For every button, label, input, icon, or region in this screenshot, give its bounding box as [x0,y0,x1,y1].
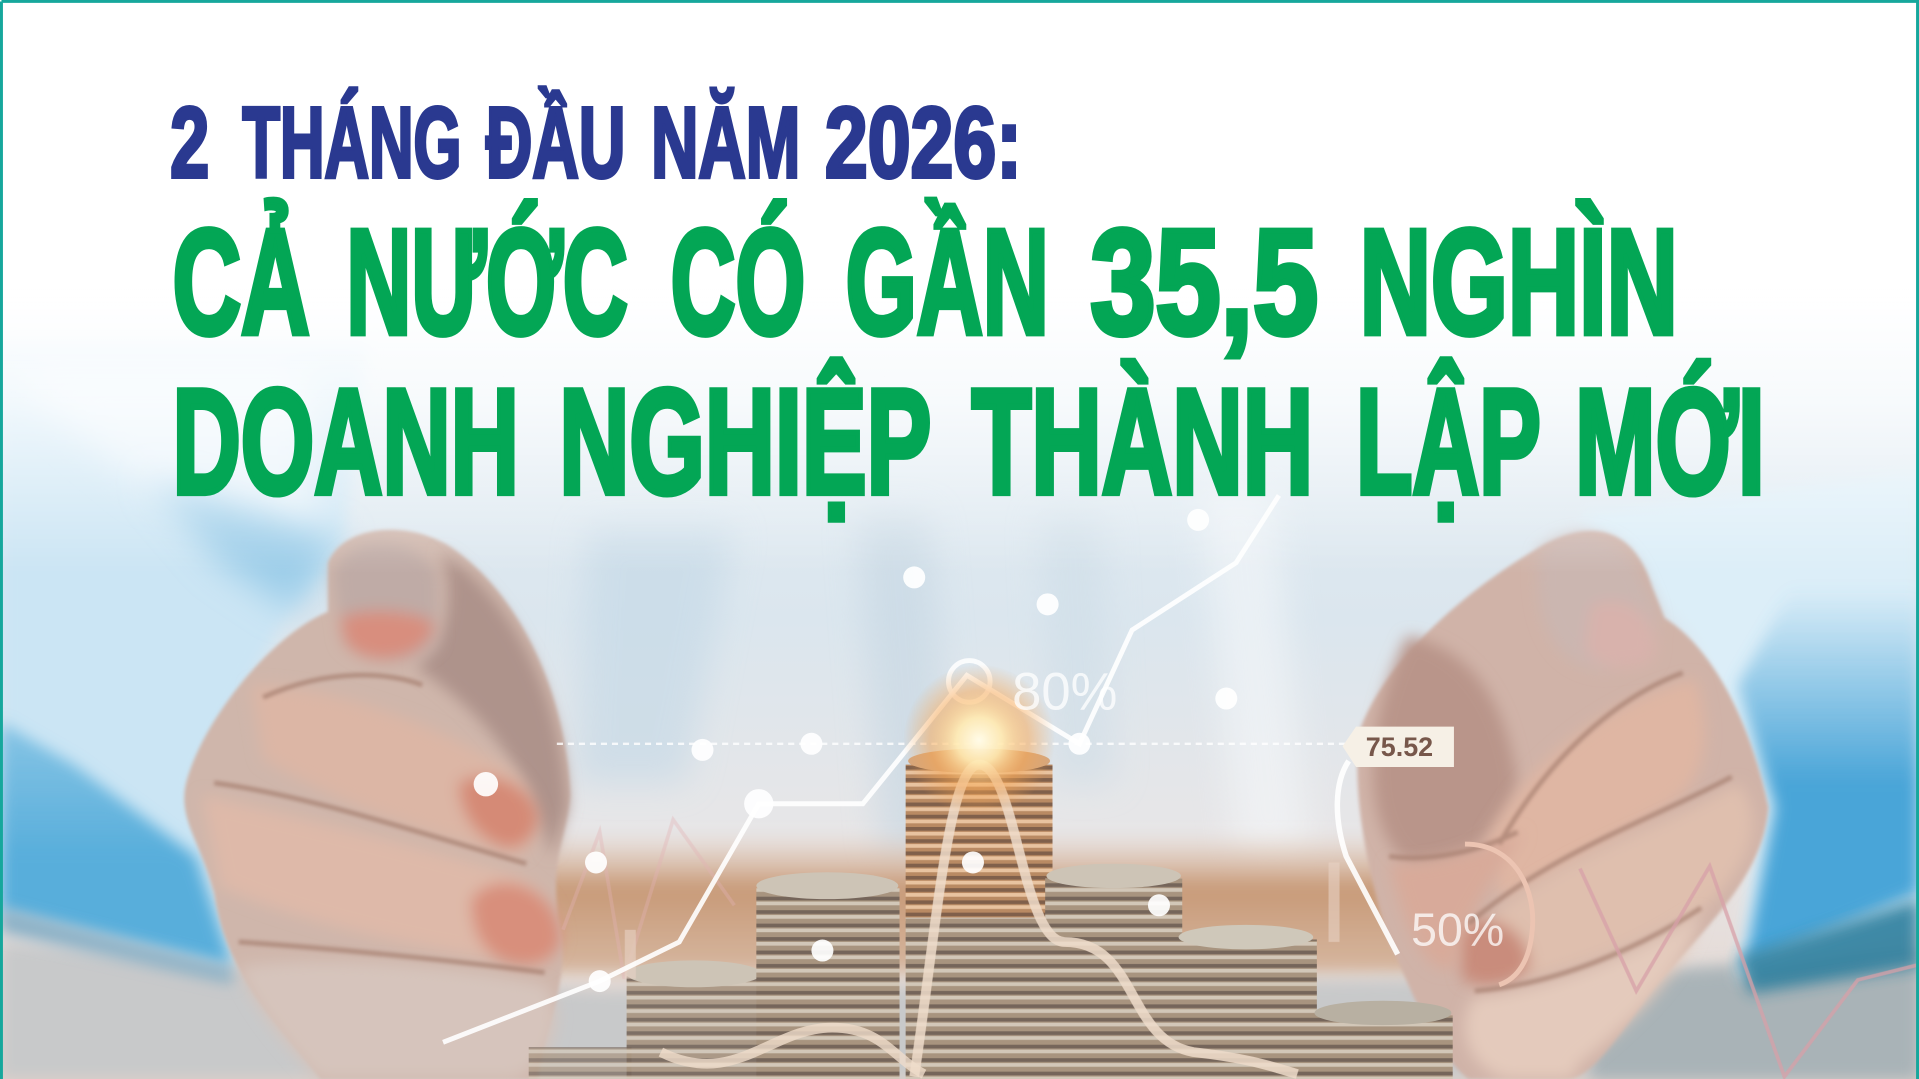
title [170,87,1765,525]
title line 2: GẦN [846,198,1049,365]
title line 1: 2 [170,87,209,199]
pink ring [1465,844,1533,985]
coin stack 1 [627,960,761,1079]
chart label 80%: 80% [1012,663,1117,722]
right hand: ring finger [1465,911,1701,1079]
right hand: palm highlight [1389,832,1524,969]
title line 1: ĐẦU [486,87,625,199]
coin stack 5 [1177,925,1317,1079]
title line 2: CÓ [671,198,805,365]
left hand: ring finger [239,962,556,1079]
left hand: finger creases [214,675,545,973]
right sleeve [1579,471,1919,993]
coin stack 3 [906,749,1053,1079]
coin stack 4 [1045,864,1182,1079]
title line 3: MỚI [1575,358,1765,525]
white drop line [1337,761,1398,954]
title line 2 [173,198,1678,365]
coin stack 2 [756,872,900,1079]
data dots [474,509,1237,992]
shirt background [0,245,1919,1079]
left hand: thumb [333,543,438,662]
table right tone [1591,954,1919,1079]
title line 3: DOANH [173,358,519,525]
coin stack 6 [1312,1001,1453,1079]
value tag 75.52 [1343,727,1454,767]
chart label 50%: 50% [1411,904,1504,956]
title line 2: NGHÌN [1360,198,1678,365]
shirt folds [575,489,1310,856]
ring around peak [948,661,990,702]
wooden table band [465,832,1444,973]
title line 1 [170,87,1022,199]
table surface [0,942,1919,1079]
title line 3: LẬP [1356,358,1541,525]
title line 3 [173,358,1765,525]
right hand: thumb [1538,534,1657,670]
value tag 75.52: 75.52 [1366,732,1433,762]
left hand: back shading [416,551,568,856]
left sleeve [0,343,367,984]
title line 1: 2026: [825,87,1022,199]
low curve over coins [661,1028,924,1074]
coin stack 7 [529,1047,632,1079]
right hand [1357,531,1768,1079]
right hand: middle finger [1456,783,1753,985]
title line 3: THÀNH [972,358,1313,525]
left hand: middle finger [202,795,561,966]
title line 2: CẢ [173,198,310,365]
white top fade [0,0,1919,575]
title line 2: NƯỚC [346,198,628,365]
smooth curve over coins [914,765,1297,1077]
right hand: index finger [1487,679,1705,899]
dashed line [557,743,1346,745]
title line 2: 35,5 [1090,198,1318,365]
white growth line [443,495,1279,1042]
glow over top coin [903,664,1055,816]
pink chart line and candles [563,820,1917,1077]
left hand: index finger [251,685,538,856]
coin stacks [529,749,1453,1079]
title line 1: NĂM [651,87,800,199]
title line 1: THÁNG [242,87,461,199]
title line 3: NGHIỆP [559,358,931,525]
right hand: finger creases [1389,673,1732,991]
right hand: palm shade [1373,636,1518,863]
left hand [184,530,1768,1079]
